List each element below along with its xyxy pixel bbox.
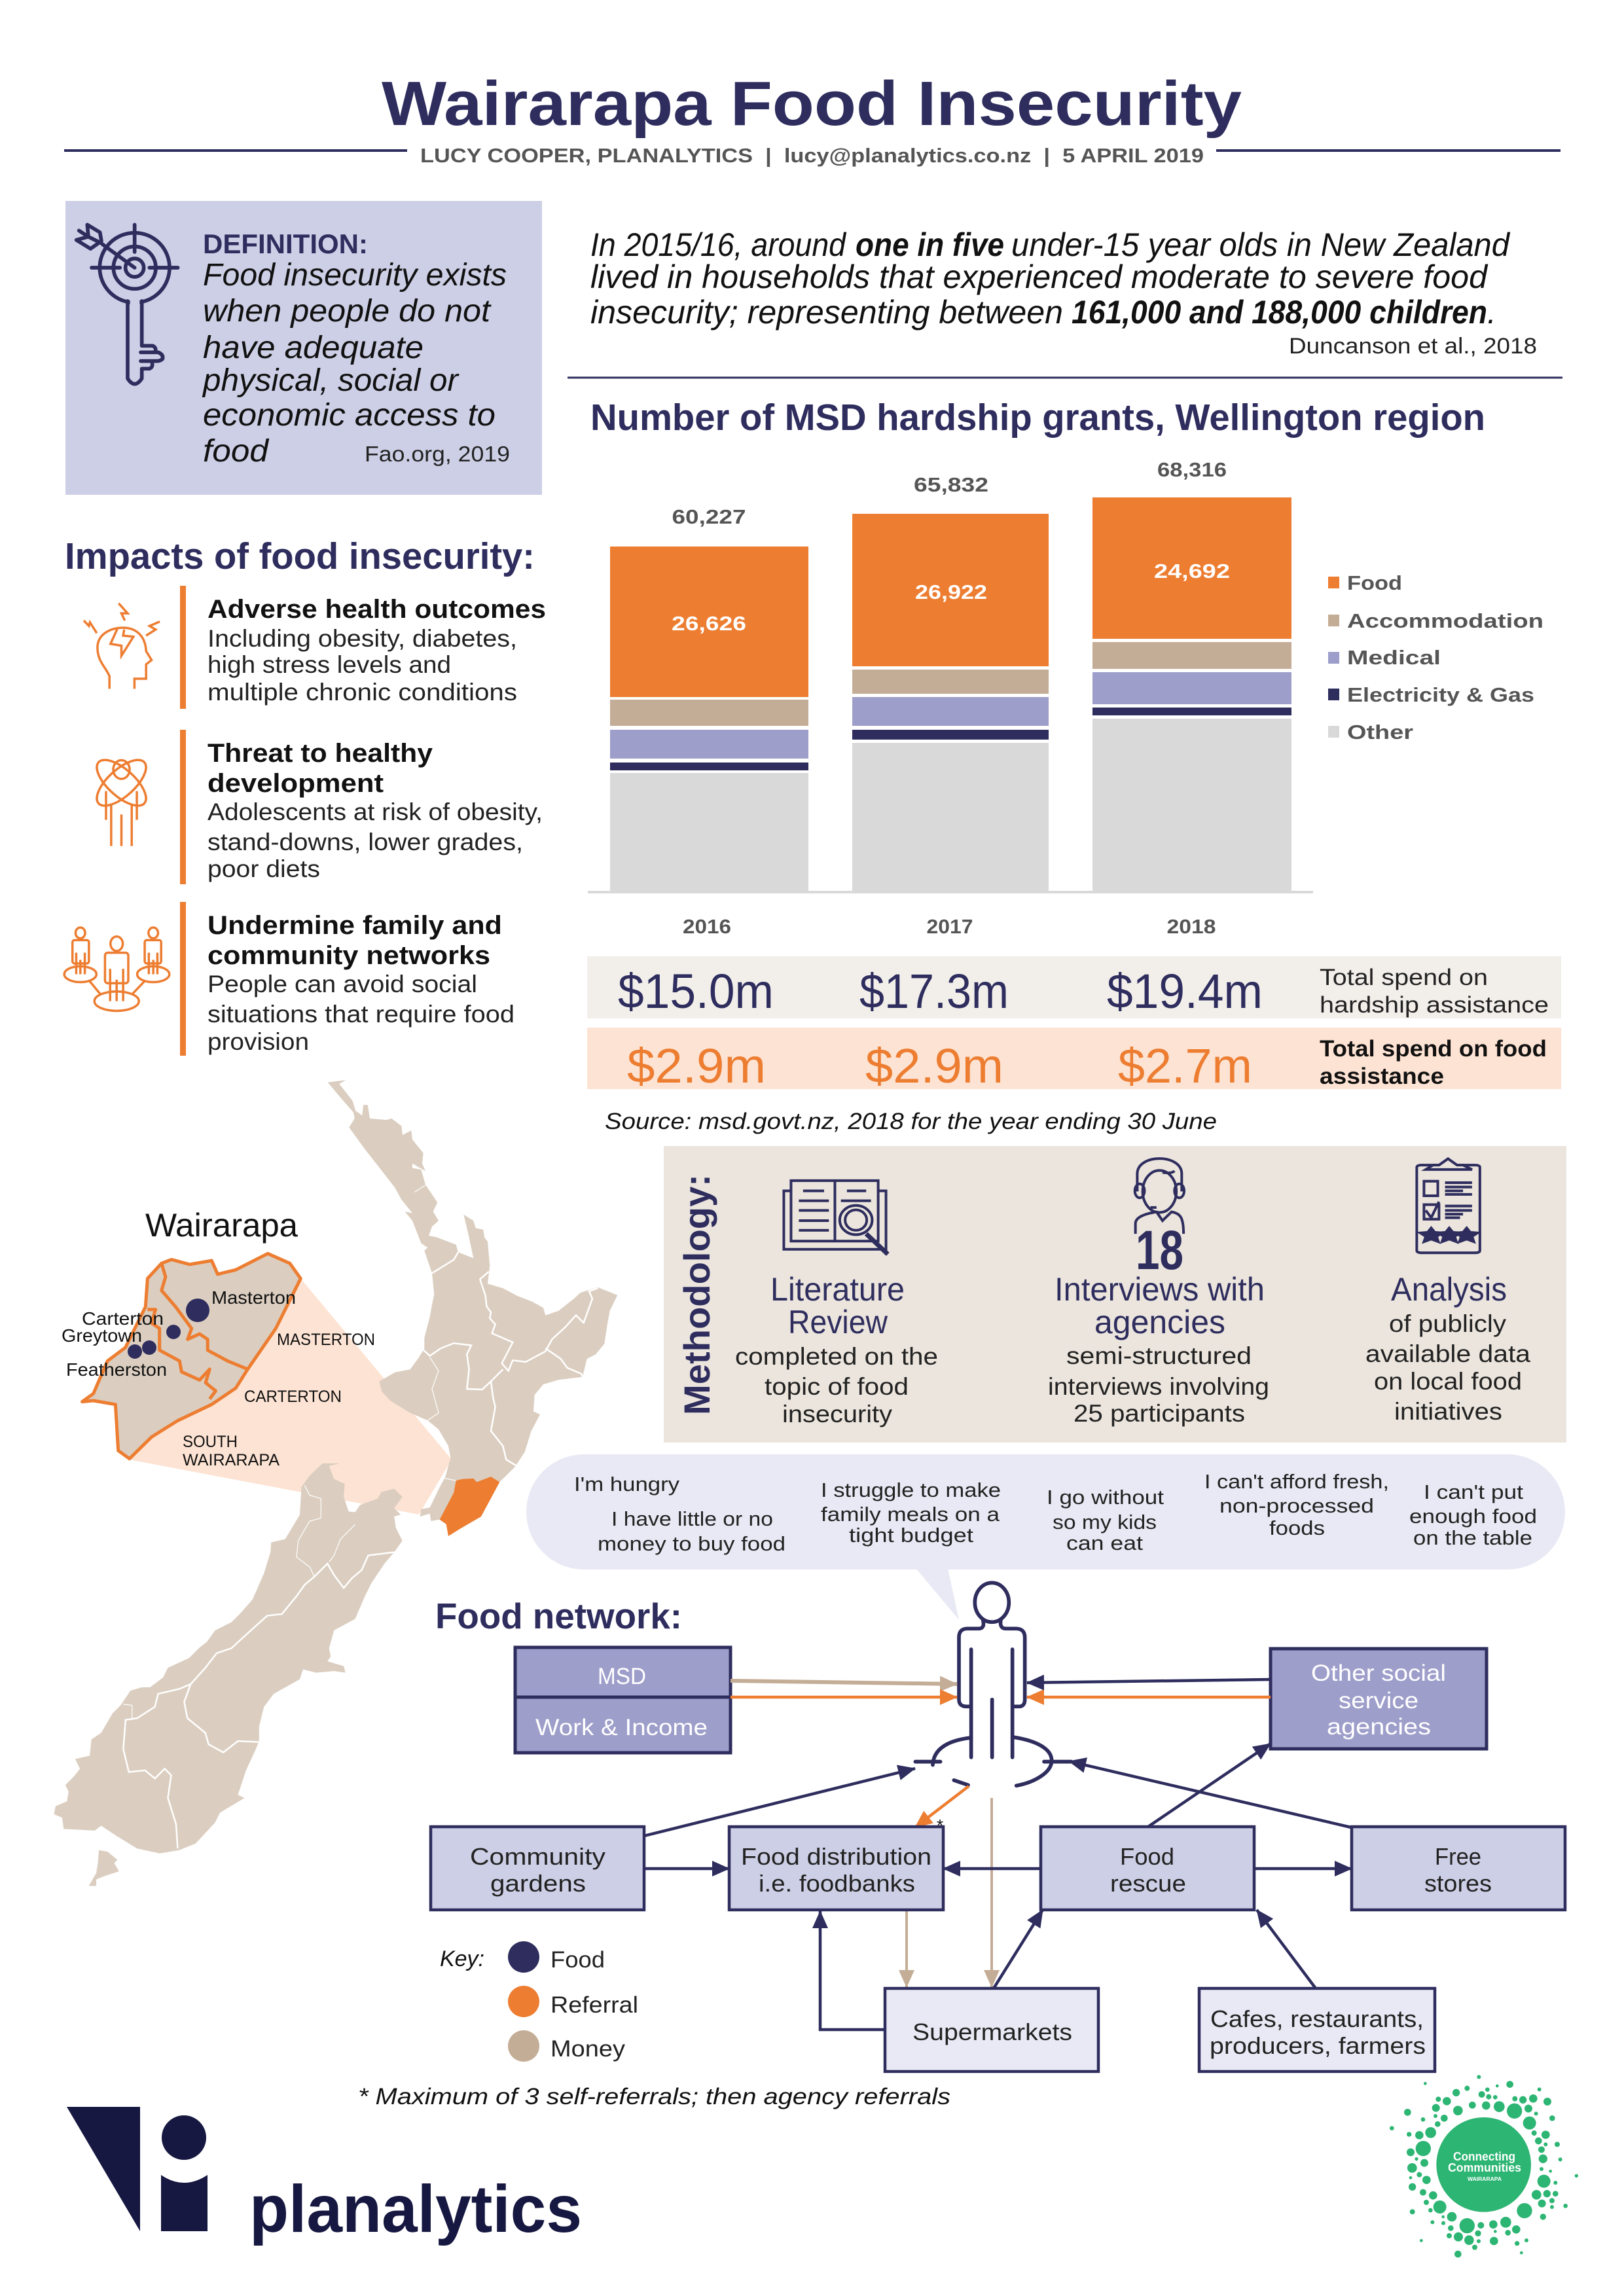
row: total spend on hardship assistance: $17.3m	[859, 964, 1009, 1018]
bar 2017: 26,922	[915, 581, 987, 603]
speech bubble	[526, 1454, 1565, 1620]
bar 2017: 2017	[927, 915, 973, 938]
icon: interviewer with headset	[1135, 1158, 1184, 1234]
impact: undermine family and community networks: provision	[208, 1028, 309, 1055]
box: cafes, restaurants, producers, farmers: Cafes, restaurants,	[1210, 2005, 1424, 2032]
heading: food network: Food network:	[435, 1596, 682, 1636]
chart legend: Other	[1347, 721, 1413, 744]
row: total spend on hardship assistance	[587, 956, 1561, 1018]
icon: stressed head	[84, 603, 160, 689]
box: free stores: stores	[1424, 1870, 1492, 1897]
box: other social service agencies	[1271, 1649, 1487, 1749]
box: food rescue: rescue	[1110, 1870, 1186, 1897]
footnote: * Maximum of 3 self-referrals; then agency referrals	[358, 2084, 950, 2109]
box: food distribution: Food distribution	[741, 1843, 931, 1870]
map labels: Featherston	[66, 1359, 167, 1380]
impact: adverse health outcomes: Including obesity, diabetes,	[208, 625, 517, 652]
quote text: .	[1487, 294, 1496, 331]
quote text: In 2015/16, around	[590, 226, 847, 263]
bubble quotes: I can't afford fresh,	[1204, 1470, 1389, 1493]
definition text: when people do not	[203, 294, 492, 329]
method: interviews with agencies: agencies	[1094, 1304, 1225, 1340]
method: analysis: of publicly	[1389, 1310, 1507, 1337]
chart heading: Number of MSD hardship grants, Wellington region	[590, 397, 1485, 439]
legend: key: Referral	[550, 1992, 638, 2018]
box: food rescue	[1041, 1827, 1254, 1910]
logo: Connecting Communities Wairarapa: Connecting	[1453, 2150, 1515, 2163]
bar 2017	[852, 473, 1049, 938]
impact: undermine family and community networks: community networks	[208, 941, 490, 970]
arrows: money	[731, 1681, 992, 1987]
arrows: food	[644, 1679, 1352, 2030]
definition text: physical, social or	[202, 363, 460, 398]
map labels: CARTERTON	[244, 1388, 342, 1406]
box: other social service agencies: agencies	[1327, 1714, 1431, 1740]
definition text: Food insecurity exists	[203, 258, 507, 293]
box: MSD and Work & Income	[515, 1647, 731, 1753]
icon: person at centre	[915, 1583, 1072, 1785]
bubble quotes: I'm hungry	[574, 1473, 680, 1496]
box: MSD and Work & Income: MSD	[598, 1664, 646, 1689]
legend: key: Money	[550, 2036, 626, 2062]
chart legend: Electricity & Gas	[1347, 683, 1534, 706]
referral footnote marker: *	[937, 1816, 943, 1835]
icon: book and magnifier	[784, 1181, 888, 1254]
definition text: Fao.org, 2019	[365, 442, 510, 466]
map labels: Wairarapa	[145, 1207, 298, 1244]
map labels: SOUTH	[183, 1433, 238, 1451]
heading: impacts: Impacts of food insecurity:	[65, 535, 535, 577]
method: interviews with agencies: 25 participants	[1074, 1400, 1245, 1427]
method: literature review: topic of food	[765, 1373, 909, 1400]
row: total spend on hardship assistance: Total spend on	[1320, 965, 1488, 990]
row: total spend on food assistance	[587, 1028, 1561, 1093]
food network diagram	[431, 1583, 1565, 2072]
map labels: Carterton	[82, 1308, 164, 1329]
impact: adverse health outcomes: Adverse health outcomes	[208, 595, 546, 624]
title: Wairarapa Food Insecurity	[382, 69, 1242, 139]
bubble quotes: on the table	[1413, 1526, 1532, 1549]
bar 2016: 26,626	[672, 612, 746, 635]
method: interviews with agencies: interviews involving	[1048, 1373, 1269, 1400]
method: analysis: initiatives	[1394, 1398, 1502, 1425]
impact: adverse health outcomes: multiple chronic conditions	[208, 679, 517, 706]
impact: undermine family and community networks	[64, 902, 514, 1056]
logo: Connecting Communities Wairarapa: Communities	[1448, 2161, 1521, 2174]
logo: Connecting Communities Wairarapa	[1390, 2075, 1578, 2257]
bar 2018: 68,316	[1157, 458, 1227, 481]
quote text: insecurity; representing between	[590, 294, 1063, 331]
definition text: have adequate	[203, 331, 424, 365]
method: literature review: Literature	[770, 1271, 905, 1308]
icon: person with atom	[90, 752, 153, 846]
icon: target key	[77, 224, 178, 384]
box: food distribution	[729, 1827, 943, 1910]
inset: Wairarapa districts	[82, 1253, 300, 1459]
row: total spend on food assistance: $2.7m	[1118, 1039, 1252, 1093]
definition text: food	[203, 434, 269, 469]
chart legend: Food	[1347, 571, 1402, 594]
bubble quotes: enough food	[1409, 1505, 1537, 1528]
row: total spend on food assistance: assistance	[1320, 1064, 1444, 1089]
box: supermarkets: Supermarkets	[912, 2018, 1072, 2045]
panel: definition	[65, 201, 542, 495]
stacked bar chart	[588, 458, 1313, 938]
bubble quotes: money to buy food	[598, 1532, 785, 1555]
bubble quotes: so my kids	[1053, 1511, 1157, 1534]
impact: threat to healthy development: Threat to healthy	[208, 739, 433, 768]
method: interviews with agencies	[1048, 1271, 1269, 1427]
row: total spend on food assistance: Total spend on food	[1320, 1036, 1547, 1062]
chart legend: Medical	[1347, 646, 1441, 669]
box: community gardens: Community	[470, 1843, 605, 1870]
bubble quotes: I can't put	[1424, 1480, 1523, 1503]
bar 2018: 24,692	[1154, 560, 1230, 583]
bubble quotes: I have little or no	[611, 1507, 773, 1530]
definition text: economic access to	[203, 398, 496, 433]
town markers	[128, 1299, 209, 1359]
bar 2017: 65,832	[914, 473, 988, 496]
map labels: Greytown	[62, 1325, 142, 1346]
map: Wairarapa region highlight	[440, 1477, 499, 1536]
row: total spend on hardship assistance: hardship assistance	[1320, 992, 1549, 1018]
map: South Island	[54, 1463, 403, 1886]
row: total spend on food assistance: $2.9m	[865, 1039, 1003, 1093]
bar 2016: 2016	[683, 915, 731, 938]
impact: threat to healthy development: poor diets	[208, 855, 320, 882]
icon: connected people	[64, 927, 170, 1011]
box: community gardens: gardens	[490, 1870, 586, 1897]
row: total spend on hardship assistance: $15.0m	[618, 964, 774, 1018]
map labels: WAIRARAPA	[183, 1451, 280, 1469]
box: free stores	[1352, 1827, 1565, 1910]
method: analysis: on local food	[1374, 1368, 1522, 1395]
map of New Zealand with Wairarapa inset	[54, 1080, 617, 1886]
box: food distribution: i.e. foodbanks	[759, 1870, 915, 1897]
box: MSD and Work & Income: Work & Income	[535, 1715, 708, 1740]
bar 2018	[1092, 458, 1291, 938]
method: literature review: Review	[788, 1304, 888, 1340]
box: cafes, restaurants, producers, farmers	[1199, 1988, 1435, 2072]
box: supermarkets	[885, 1988, 1098, 2072]
chart legend: Accommodation	[1347, 609, 1543, 632]
impact: undermine family and community networks: Undermine family and	[208, 911, 502, 940]
quote text: one in five	[856, 226, 1004, 263]
logo: planalytics	[67, 2107, 582, 2246]
impact: undermine family and community networks: People can avoid social	[208, 971, 477, 997]
bubble quotes	[574, 1470, 1537, 1555]
legend: key: Food	[550, 1947, 605, 1973]
quote text: under-15 year olds in New Zealand	[1011, 226, 1511, 263]
bar 2016: 60,227	[672, 505, 746, 528]
method: analysis: Analysis	[1391, 1271, 1507, 1308]
method: interviews with agencies: semi-structured	[1066, 1342, 1252, 1369]
method: literature review	[735, 1271, 938, 1427]
chart legend	[1328, 571, 1543, 744]
quote text: Duncanson et al., 2018	[1289, 334, 1537, 359]
map labels	[62, 1207, 375, 1469]
impact: undermine family and community networks: situations that require food	[208, 1001, 514, 1028]
impact: threat to healthy development: development	[208, 769, 384, 798]
bubble quotes: non-processed	[1219, 1494, 1374, 1517]
definition text	[202, 228, 510, 469]
impact: threat to healthy development	[90, 730, 543, 884]
source note: Source: msd.govt.nz, 2018 for the year ending 30 June	[605, 1109, 1217, 1134]
bubble quotes: family meals on a	[821, 1503, 1000, 1526]
bar 2018: 2018	[1166, 915, 1216, 938]
row: total spend on hardship assistance: $19.4m	[1107, 964, 1263, 1018]
bubble quotes: can eat	[1066, 1532, 1143, 1554]
heading: methodology: Methodology:	[676, 1174, 717, 1415]
box: cafes, restaurants, producers, farmers: producers, farmers	[1210, 2032, 1426, 2059]
box: other social service agencies: service	[1339, 1688, 1418, 1713]
wedge: zoom highlight	[129, 1278, 452, 1515]
bubble quotes: I go without	[1047, 1486, 1164, 1509]
panel: methodology	[664, 1146, 1566, 1443]
box: community gardens	[431, 1827, 644, 1910]
legend: key: Key:	[440, 1946, 484, 1971]
impact: adverse health outcomes	[84, 586, 546, 709]
impact: adverse health outcomes: high stress levels and	[208, 651, 451, 678]
logo: Connecting Communities Wairarapa: WAIRARAPA	[1468, 2176, 1502, 2182]
method: literature review: insecurity	[782, 1401, 893, 1427]
bar 2016	[610, 505, 808, 938]
method: analysis: available data	[1365, 1340, 1530, 1367]
map labels: MASTERTON	[277, 1331, 375, 1349]
box: free stores: Free	[1435, 1843, 1481, 1870]
icon: clipboard checklist	[1416, 1158, 1480, 1253]
map labels: Masterton	[211, 1287, 296, 1308]
logo: planalytics: planalytics	[249, 2172, 582, 2246]
method: interviews with agencies: Interviews with	[1055, 1271, 1265, 1308]
quote text: lived in households that experienced moderate to severe food	[590, 259, 1489, 295]
box: food rescue: Food	[1120, 1843, 1174, 1870]
impact: threat to healthy development: stand-downs, lower grades,	[208, 829, 523, 855]
definition text: DEFINITION:	[203, 228, 368, 259]
box: other social service agencies: Other social	[1311, 1660, 1446, 1686]
impact: threat to healthy development: Adolescents at risk of obesity,	[208, 798, 543, 825]
legend: key	[440, 1941, 638, 2062]
quote text: 161,000 and 188,000 children	[1072, 294, 1487, 331]
map: North Island	[328, 1080, 617, 1536]
row: total spend on food assistance: $2.9m	[627, 1039, 766, 1093]
quote text	[590, 226, 1537, 359]
byline with rules: LUCY COOPER, PLANALYTICS | lucy@planalytics.co.nz | 5 APRIL 2019	[420, 144, 1204, 167]
number: 18 agencies: 18	[1136, 1219, 1183, 1281]
method: analysis	[1365, 1271, 1530, 1425]
bubble quotes: I struggle to make	[821, 1479, 1001, 1501]
bubble quotes: tight budget	[849, 1524, 973, 1547]
method: literature review: completed on the	[735, 1343, 938, 1370]
arrows: referral	[731, 1697, 1271, 1827]
bubble quotes: foods	[1269, 1516, 1325, 1539]
